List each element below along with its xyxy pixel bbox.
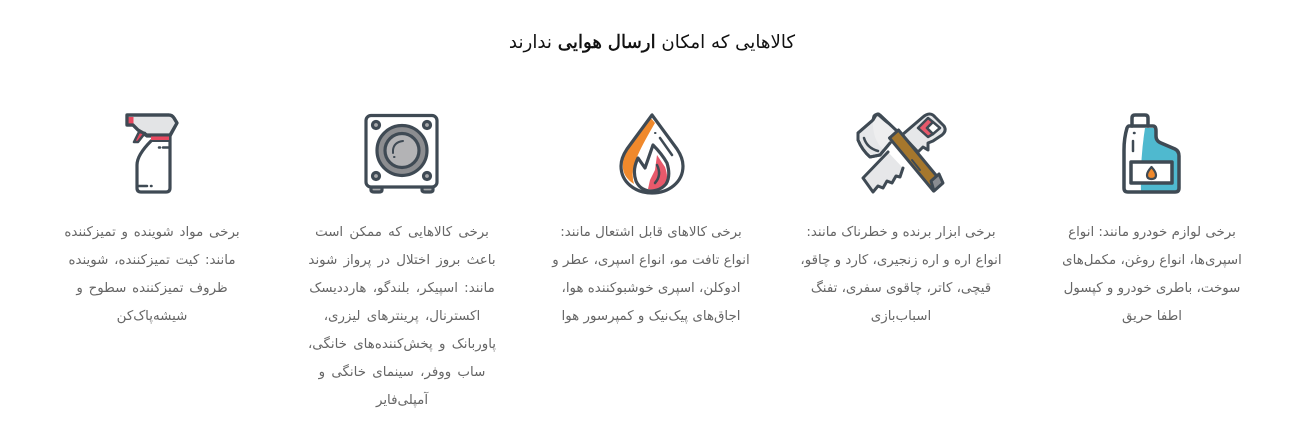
icon: oil bottle (1124, 115, 1179, 192)
text block: cleaners: برخی مواد شوینده و تمیزکننده (64, 225, 240, 240)
icon: flame drop (621, 115, 683, 193)
text block: flammable goods (552, 225, 750, 324)
icon: axe and saw (858, 114, 945, 193)
text block: audio devices: باعث بروز اختلال در پرواز شوند (308, 253, 496, 268)
text block: cleaners: مانند: کیت تمیزکننده، شوینده (68, 253, 236, 268)
text block: flammable goods: برخی کالاهای قابل اشتعال مانند: (560, 225, 742, 240)
text block: audio devices: پاوربانک و پخش‌کننده‌های خانگی، (308, 337, 496, 352)
text block: car supplies: اسپری‌ها، انواع روغن، مکمل‌های (1062, 253, 1242, 268)
icon: spray bottle (127, 115, 177, 192)
text block: sharp tools (800, 225, 1002, 324)
text block: flammable goods: انواع تافت مو، انواع اسپری، عطر و (552, 253, 750, 268)
icon: speaker (366, 116, 437, 192)
text block: audio devices: مانند: اسپیکر، بلندگو، هارددیسک (309, 281, 495, 296)
text block: sharp tools: اسباب‌بازی (871, 309, 931, 324)
text block: cleaners: ظروف تمیزکننده سطوح و (76, 281, 228, 296)
text block: audio devices: اکسترنال، پرینترهای لیزری، (324, 309, 480, 324)
text block: audio devices (308, 225, 496, 408)
text block: cleaners: شیشه‌پاک‌کن (117, 309, 187, 324)
text block: flammable goods: ادوکلن، اسپری خوشبوکننده هوا، (562, 281, 740, 296)
title: کالاهایی که امکان ارسال هوایی ندارند (509, 32, 795, 53)
text block: audio devices: ساب ووفر، سینمای خانگی و (319, 365, 485, 380)
text block: car supplies: اطفا حریق (1122, 309, 1182, 324)
text block: sharp tools: برخی ابزار برنده و خطرناک مانند: (806, 225, 996, 240)
text block: car supplies: سوخت، باطری خودرو و کپسول (1064, 281, 1240, 296)
text block: cleaners (64, 225, 240, 324)
text block: car supplies: برخی لوازم خودرو مانند: انواع (1068, 225, 1236, 240)
text block: car supplies (1062, 225, 1242, 324)
text block: audio devices: برخی کالاهایی که ممکن است (315, 225, 489, 240)
text block: sharp tools: قیچی، کاتر، چاقوی سفری، تفنگ (811, 281, 991, 296)
text block: audio devices: آمپلی‌فایر (376, 393, 428, 408)
text block: flammable goods: اجاق‌های پیک‌نیک و کمپرسور هوا (562, 309, 740, 324)
text block: sharp tools: انواع اره و اره زنجیری، کارد و چاقو، (800, 253, 1002, 268)
